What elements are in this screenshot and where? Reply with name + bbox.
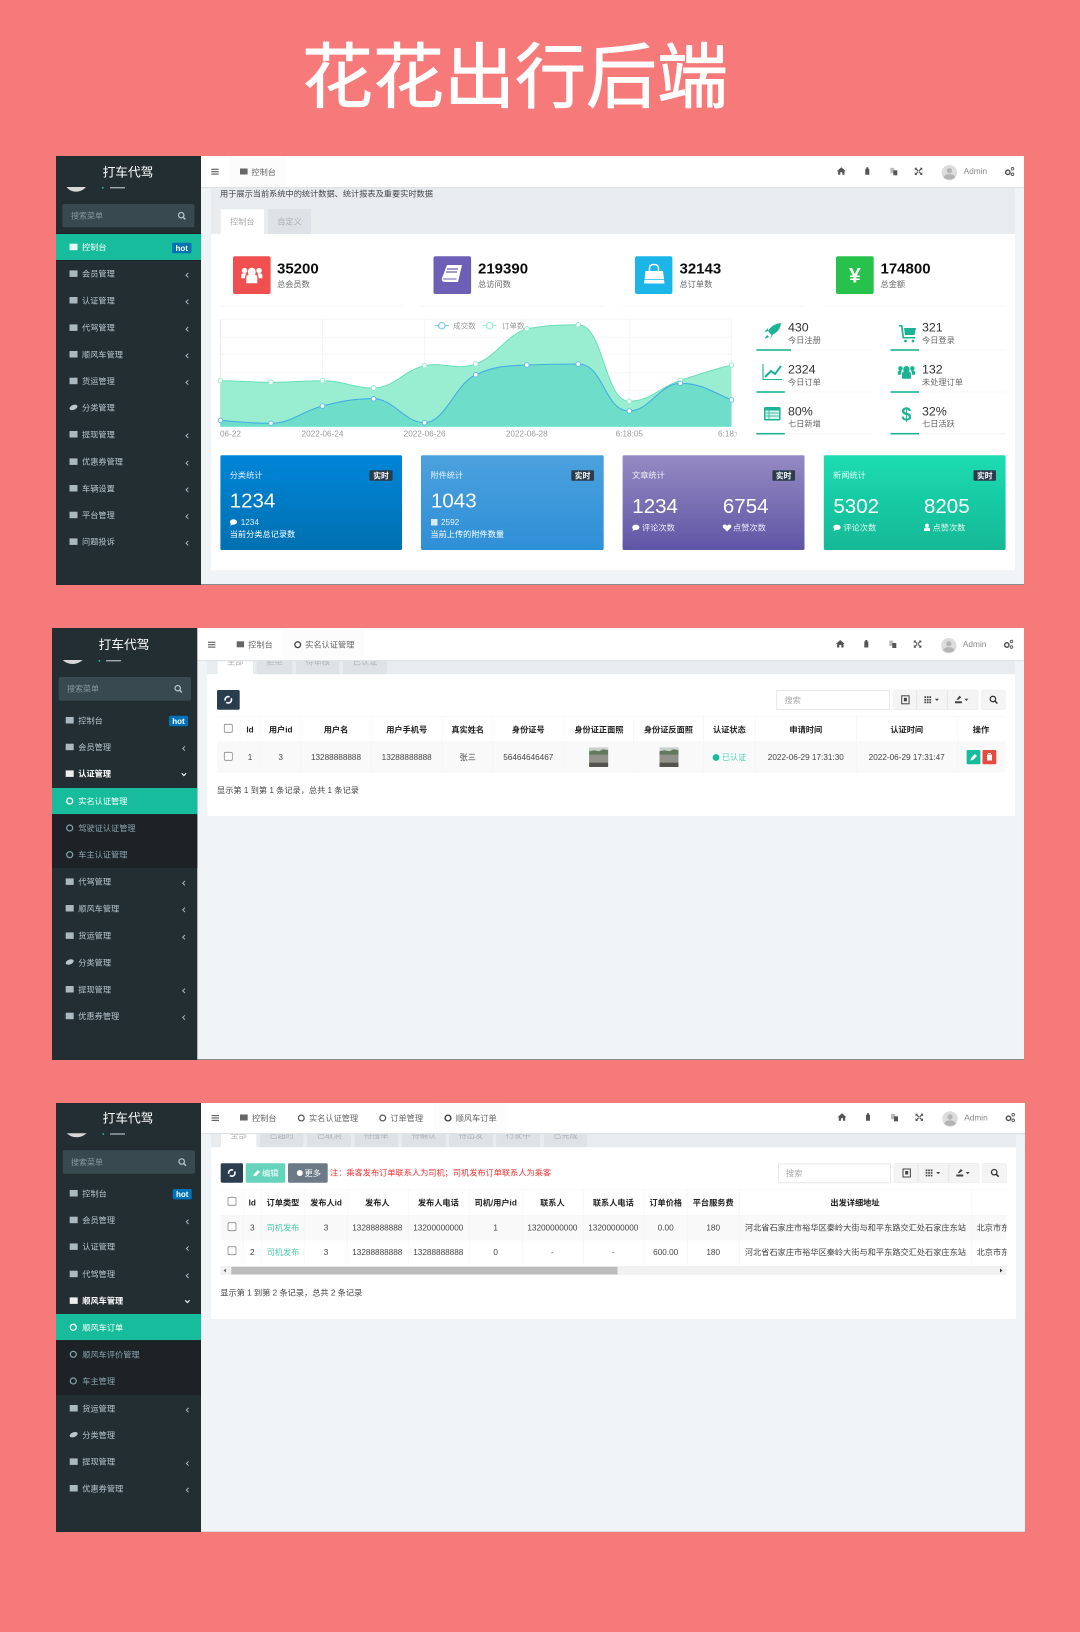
table: 身份证号 (512, 725, 545, 735)
table: 13288888888 (382, 753, 432, 762)
sidebar: 提现管理 (82, 1457, 115, 1467)
chart legend: 订单数 (502, 321, 525, 331)
sidebar: 问题投诉 (82, 537, 115, 547)
table: 56464646467 (503, 753, 554, 762)
white table panel (211, 1147, 1016, 1319)
menu item active: 控制台 (82, 242, 107, 252)
menu item dashboard: 控制台 (78, 715, 103, 725)
status tabs: 待出发 (459, 1130, 483, 1140)
search input and toolbar (777, 690, 1005, 710)
edit button (246, 1163, 285, 1183)
card: category stats: 实时 (373, 470, 389, 480)
area chart: 06-22 (220, 430, 241, 439)
status tabs: 全部 (227, 656, 243, 666)
stat: amount: 174800 (880, 260, 931, 277)
search input and toolbar: 搜索 (784, 695, 801, 705)
submenu block (56, 1340, 201, 1395)
status tabs: 已取消 (317, 1130, 341, 1140)
sidebar: 打车代驾 (103, 1112, 153, 1126)
edit button: 编辑 (262, 1168, 278, 1178)
status tabs: 全部 (230, 1130, 247, 1140)
mini stat: seven day active (890, 404, 1006, 434)
top bar: 实名认证管理 (305, 640, 354, 650)
sidebar: 会员管理 (82, 269, 115, 279)
area chart: 2022-06-28 (506, 430, 548, 439)
table (220, 1189, 1026, 1275)
sidebar: 代驾管理 (82, 323, 115, 333)
card: news stats: 点赞次数 (933, 522, 965, 532)
card: article stats: 点赞次数 (733, 522, 766, 532)
card: article stats: 1234 (632, 495, 678, 518)
menu item dashboard: 控制台 (82, 1188, 107, 1198)
table: 180 (706, 1248, 720, 1257)
table: 司机/用户id (475, 1198, 517, 1208)
table: 用户手机号 (386, 725, 427, 735)
sidebar: 优惠券管理 (82, 1483, 123, 1493)
stat: orders: 总订单数 (680, 279, 712, 289)
table: 订单价格 (649, 1198, 683, 1208)
card: attachment stats: 附件统计 (430, 470, 463, 480)
submenu block: 顺风车评价管理 (82, 1349, 140, 1359)
sidebar: 分类管理 (78, 957, 111, 967)
area chart: 6:18:05 (616, 430, 643, 439)
table: 河北省石家庄市裕华区秦岭大街与和平东路交汇处石家庄东站 (745, 1222, 966, 1232)
sidebar search (62, 204, 194, 227)
table: - (551, 1248, 554, 1257)
status tabs (218, 655, 387, 675)
table: 身份证反面照 (644, 725, 693, 735)
title: 花花出行后端 (302, 39, 728, 118)
menu item active: 顺风车订单 (82, 1322, 123, 1332)
table: 13288888888 (352, 1224, 403, 1232)
sidebar: 认证管理 (78, 769, 111, 779)
top bar (197, 628, 1024, 661)
sidebar: 提现管理 (82, 429, 115, 439)
top bar: 实名认证管理 (309, 1113, 358, 1123)
status tabs: 行驶中 (506, 1130, 530, 1140)
more button: 更多 (304, 1168, 321, 1178)
card: article stats: 评论次数 (642, 522, 675, 532)
sidebar: 打车代驾 (103, 166, 153, 180)
chart legend: 成交数 (453, 321, 476, 331)
card: attachment stats: 2592 (441, 518, 460, 527)
mini stat: today orders: 今日订单 (788, 377, 821, 387)
stat: orders: 32143 (680, 260, 721, 277)
stat: visits: 总访问数 (478, 279, 511, 289)
table: 180 (706, 1224, 720, 1232)
card: news stats (824, 455, 1006, 550)
status tabs: 已完成 (553, 1130, 578, 1140)
submenu block: 车主管理 (82, 1376, 115, 1386)
card: category stats: 1234 (241, 518, 259, 527)
table: - (612, 1248, 615, 1257)
sidebar search: 搜索菜单 (71, 1157, 103, 1167)
panel: dashboard screenshot (56, 156, 1024, 585)
table: 1 (248, 753, 253, 762)
top bar: 订单管理 (390, 1113, 423, 1123)
table: 13288888888 (311, 753, 361, 762)
sidebar (56, 156, 201, 585)
table: 司机发布 (267, 1222, 299, 1232)
table: 认证状态 (713, 725, 746, 735)
card: news stats: 8205 (924, 495, 970, 518)
stat: amount: ¥ (849, 264, 861, 288)
card: news stats: 5302 (833, 495, 879, 518)
stat: orders (635, 256, 721, 294)
status tabs: 拒绝 (266, 656, 283, 666)
stat: amount: 总金额 (880, 279, 905, 289)
area chart: 2022-06-26 (404, 430, 446, 439)
red note: 注：乘客发布订单联系人为司机；司机发布订单联系人为乘客 (330, 1168, 551, 1178)
sidebar: 会员管理 (78, 742, 111, 752)
table: 用户id (269, 725, 293, 735)
card: category stats: 分类统计 (230, 470, 262, 480)
refresh button (221, 1163, 243, 1183)
menu item dashboard: hot (176, 1190, 189, 1199)
menu item dashboard: hot (172, 717, 185, 726)
mini stat: today registrations (756, 321, 872, 351)
card: category stats (220, 455, 402, 550)
sidebar: 代驾管理 (78, 877, 111, 887)
menu item dashboard (66, 715, 188, 726)
table: 0 (493, 1248, 498, 1257)
table: 真实姓名 (451, 725, 484, 735)
menu item dashboard (70, 1188, 192, 1199)
mini stat: seven day new (756, 404, 872, 434)
table: 13200000000 (588, 1224, 639, 1232)
more button (288, 1163, 328, 1183)
table: 13288888888 (413, 1248, 464, 1257)
top bar: 控制台 (248, 640, 273, 650)
table: 司机发布 (267, 1247, 299, 1257)
area chart: 2022-06-24 (302, 430, 344, 439)
table: 平台服务费 (693, 1198, 734, 1208)
sidebar search: 搜索菜单 (71, 211, 103, 221)
top bar (201, 156, 1024, 188)
table: 3 (324, 1224, 329, 1232)
refresh button (217, 690, 240, 710)
sidebar: 平台管理 (82, 510, 115, 520)
card: article stats: 实时 (776, 470, 792, 480)
mini stat: today orders (756, 362, 872, 393)
card: category stats: 1234 (230, 490, 275, 512)
table: 1 (493, 1224, 498, 1232)
sidebar search (63, 1150, 195, 1174)
table: 2 (250, 1248, 255, 1257)
mini stat: seven day new: 80% (788, 404, 813, 418)
sidebar search (59, 677, 191, 701)
table: 联系人 (540, 1198, 565, 1208)
sidebar: 会员管理 (82, 1215, 115, 1225)
stat: visits: 219390 (478, 260, 528, 277)
card: article stats: 6754 (723, 495, 769, 518)
card: news stats: 实时 (977, 470, 993, 480)
horizontal scrollbar (220, 1266, 1007, 1275)
sidebar: 代驾管理 (82, 1269, 115, 1279)
card: attachment stats: 实时 (575, 470, 591, 480)
table footer text: 显示第 1 到第 1 条记录，总共 1 条记录 (217, 785, 359, 795)
table: 认证时间 (890, 725, 923, 735)
top bar: 控制台 (252, 1113, 277, 1123)
sidebar: 分类管理 (82, 403, 115, 413)
card: news stats: 评论次数 (843, 522, 876, 532)
sidebar: 货运管理 (82, 376, 115, 386)
table: 600.00 (653, 1248, 679, 1257)
search input and toolbar: 搜索 (786, 1168, 802, 1178)
table footer text: 显示第 1 到第 2 条记录，总共 2 条记录 (220, 1288, 362, 1298)
status tabs: 待接单 (364, 1130, 389, 1140)
submenu block (52, 814, 197, 868)
status tabs (221, 1128, 587, 1148)
table: 订单类型 (267, 1198, 299, 1208)
table: 0.00 (658, 1224, 674, 1232)
table: 发布人 (365, 1198, 390, 1208)
top bar (201, 1103, 1025, 1134)
table: 北京市东城区 (977, 1222, 1026, 1232)
sidebar: 认证管理 (82, 295, 115, 305)
stat: members: 总会员数 (277, 279, 310, 289)
table: 13200000000 (527, 1224, 578, 1232)
edit button (967, 750, 980, 764)
mini stat: today orders: 2324 (788, 362, 816, 376)
sidebar: 顺风车管理 (78, 903, 119, 913)
sidebar: 打车代驾 (99, 638, 149, 652)
sidebar: 货运管理 (82, 1403, 115, 1413)
table: 河北省石家庄市裕华区秦岭大街与和平东路交汇处石家庄东站 (745, 1247, 966, 1257)
top bar: Admin (963, 639, 987, 649)
area chart (218, 319, 746, 439)
tabs (221, 209, 311, 234)
table: 操作 (973, 725, 989, 735)
sidebar (56, 1103, 201, 1532)
table: 已认证 (722, 752, 746, 762)
mini stat: seven day active: $ (901, 404, 911, 424)
submenu block: 驾驶证认证管理 (78, 823, 136, 833)
status tabs: 待审核 (305, 656, 330, 666)
status tabs: 已认证 (353, 656, 377, 666)
table (217, 717, 1006, 773)
sidebar: 优惠券管理 (78, 1011, 119, 1021)
menu item active (56, 1314, 201, 1340)
table: Id (249, 1198, 256, 1208)
stat: members (233, 256, 319, 294)
card: category stats: 当前分类总记录数 (230, 529, 295, 539)
tabs: 控制台 (230, 217, 255, 227)
stat: visits (434, 256, 528, 294)
sidebar: 提现管理 (78, 984, 111, 994)
table: 发布人id (310, 1198, 342, 1208)
white table panel (207, 674, 1015, 816)
table: 身份证正面照 (574, 725, 623, 735)
top bar: Admin (964, 1112, 988, 1122)
panel: ride-share orders screenshot (56, 1103, 1026, 1532)
table: Id (246, 726, 254, 735)
table: 3 (250, 1224, 255, 1232)
sidebar: 顺风车管理 (82, 1296, 123, 1306)
card: news stats: 新闻统计 (833, 470, 866, 480)
menu item active: 实名认证管理 (78, 796, 127, 806)
sidebar: 认证管理 (82, 1242, 115, 1252)
top bar: Admin (964, 166, 988, 176)
panel: real-name verification screenshot (52, 628, 1024, 1060)
mini stat: today logins: 321 (922, 321, 943, 335)
table: 3 (278, 753, 283, 762)
mini stat: unprocessed orders: 未处理订单 (922, 377, 963, 387)
status tabs: 待确认 (412, 1130, 436, 1140)
delete button (982, 750, 996, 764)
sidebar: 顺风车管理 (82, 349, 123, 359)
mini stat: today logins: 今日登录 (922, 335, 955, 345)
top bar: 顺风车订单 (456, 1113, 497, 1123)
card: attachment stats (421, 455, 604, 550)
card: attachment stats: 当前上传的附件数量 (430, 529, 504, 539)
mini stat: unprocessed orders (890, 362, 1006, 393)
description text: 用于展示当前系统中的统计数据、统计报表及重要实时数据 (220, 189, 433, 199)
sidebar: 分类管理 (82, 1430, 115, 1440)
sidebar search: 搜索菜单 (67, 684, 99, 694)
sidebar: 车辆设置 (82, 483, 115, 493)
menu item active (52, 788, 197, 814)
table: 申请时间 (789, 725, 822, 735)
table: 2022-06-29 17:31:47 (869, 753, 945, 762)
table: 联系人电话 (593, 1198, 634, 1208)
table: 北京市东城区 (977, 1247, 1026, 1257)
mini stat: seven day active: 32% (922, 404, 947, 418)
stat: amount (836, 256, 931, 294)
table: 发布人电话 (418, 1198, 459, 1208)
sidebar: 优惠券管理 (82, 457, 123, 467)
card: attachment stats: 1043 (431, 490, 477, 512)
chart legend (435, 321, 525, 331)
card: article stats: 文章统计 (632, 470, 665, 480)
table: 3 (324, 1248, 329, 1257)
table: 13200000000 (413, 1224, 464, 1232)
table: 2022-06-29 17:31:30 (768, 753, 844, 762)
area chart: 6:18:05 (718, 430, 746, 439)
mini stat: seven day new: 七日新增 (788, 419, 821, 429)
menu item active (56, 234, 201, 260)
mini stat: today logins (890, 321, 1006, 351)
stat: members: 35200 (277, 260, 319, 277)
mini stat: seven day active: 七日活跃 (922, 419, 955, 429)
table: 13288888888 (352, 1248, 403, 1257)
menu item active: hot (175, 244, 188, 253)
sidebar: 货运管理 (78, 931, 111, 941)
status tabs: 已超时 (269, 1130, 294, 1140)
table: 用户名 (324, 725, 348, 735)
sidebar (52, 628, 197, 1060)
top bar: 控制台 (251, 167, 276, 177)
mini stat: unprocessed orders: 132 (922, 362, 943, 376)
tabs: 自定义 (277, 217, 302, 227)
table: 张三 (460, 753, 476, 762)
card: article stats (623, 455, 804, 550)
mini stat: today registrations: 430 (788, 321, 809, 335)
table: 出发详细地址 (830, 1198, 880, 1208)
search input and toolbar (778, 1163, 1007, 1183)
submenu block: 车主认证管理 (78, 850, 127, 860)
mini stat: today registrations: 今日注册 (788, 335, 821, 345)
